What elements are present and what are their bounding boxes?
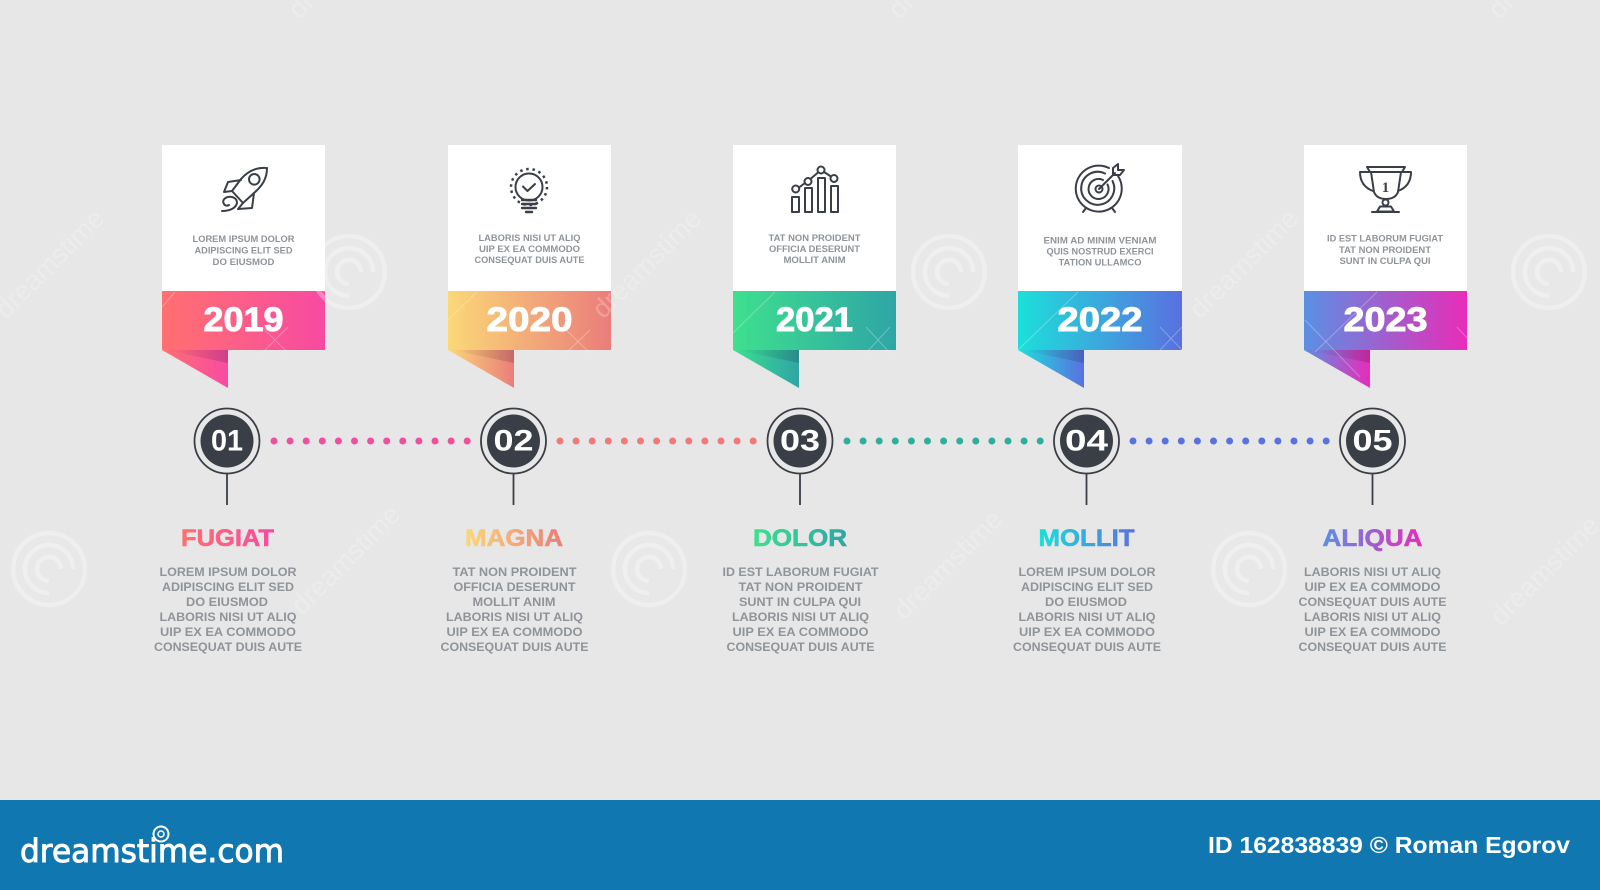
column text: Mollit: CONSEQUAT DUIS AUTE	[1013, 640, 1161, 654]
panel: 2021 card	[733, 145, 896, 388]
year band: 2021	[776, 301, 853, 339]
column text: Dolor: TAT NON PROIDENT	[738, 580, 863, 594]
column text: Magna: MAGNA	[465, 525, 563, 552]
marker 04: 04	[1065, 424, 1108, 458]
column text: Magna: TAT NON PROIDENT	[452, 565, 577, 579]
icon: trophy: 1	[1382, 180, 1389, 196]
column text: Mollit: MOLLIT	[1038, 525, 1135, 552]
year band: 2019	[204, 301, 284, 339]
dotted connector 04-05	[1130, 438, 1330, 444]
marker 01: 01	[211, 424, 243, 458]
column text: Aliqua: LABORIS NISI UT ALIQ	[1304, 610, 1441, 624]
card text: OFFICIA DESERUNT	[769, 244, 861, 254]
marker 03	[768, 408, 832, 505]
column text: Aliqua: UIP EX EA COMMODO	[1304, 625, 1440, 639]
column text: Magna: UIP EX EA COMMODO	[446, 625, 582, 639]
card text: TATION ULLAMCO	[1058, 258, 1142, 268]
icon: target with arrow	[1076, 164, 1124, 212]
column text: Fugiat: LABORIS NISI UT ALIQ	[160, 610, 296, 624]
watermark: faint lattice lines	[162, 292, 1467, 377]
column text: Aliqua: UIP EX EA COMMODO	[1304, 580, 1440, 594]
card text: DO EIUSMOD	[212, 257, 275, 267]
dotted connector 01-02	[270, 438, 471, 444]
column text: Aliqua: LABORIS NISI UT ALIQ	[1304, 565, 1441, 579]
column text: Mollit: ADIPISCING ELIT SED	[1021, 580, 1153, 594]
card text: CONSEQUAT DUIS AUTE	[474, 255, 584, 265]
year band	[448, 291, 611, 350]
panel: 2020 card	[448, 145, 611, 388]
marker 04	[1054, 408, 1119, 505]
column text: Aliqua: CONSEQUAT DUIS AUTE	[1298, 640, 1446, 654]
column text: Fugiat: UIP EX EA COMMODO	[160, 625, 296, 639]
column text: Dolor: CONSEQUAT DUIS AUTE	[726, 640, 874, 654]
column text: Dolor: UIP EX EA COMMODO	[732, 625, 868, 639]
column text: Dolor: DOLOR	[753, 525, 847, 552]
marker 02: 02	[494, 424, 534, 458]
year band	[1304, 291, 1467, 350]
year band	[733, 291, 896, 350]
footer logo: dreamstime.com	[20, 832, 284, 870]
icon: bar chart with trend line	[792, 166, 838, 212]
column text: Magna: LABORIS NISI UT ALIQ	[446, 610, 583, 624]
year band	[1018, 291, 1182, 350]
ribbon tail	[1018, 350, 1084, 388]
column text: Magna	[440, 525, 588, 654]
column text: Dolor: LABORIS NISI UT ALIQ	[732, 610, 869, 624]
card text: QUIS NOSTRUD EXERCI	[1046, 247, 1154, 257]
watermark: dreamstime text: dreamstime	[887, 504, 1008, 625]
column text: Fugiat	[154, 525, 302, 654]
column text: Aliqua: ALIQUA	[1322, 525, 1422, 552]
icon: trophy	[1360, 167, 1411, 212]
card text: ENIM AD MINIM VENIAM	[1044, 236, 1156, 246]
card text: UIP EX EA COMMODO	[479, 244, 580, 254]
column text: Fugiat: CONSEQUAT DUIS AUTE	[154, 640, 302, 654]
year band: 2022	[1058, 301, 1142, 339]
card text	[1327, 234, 1444, 266]
column text: Mollit: UIP EX EA COMMODO	[1019, 625, 1155, 639]
dotted connector 02-03	[556, 438, 757, 444]
footer credit: ID 162838839 © Roman Egorov	[1208, 832, 1570, 858]
year band: 2023	[1344, 301, 1428, 339]
card text: ID EST LABORUM FUGIAT	[1327, 234, 1444, 244]
card text: ADIPISCING ELIT SED	[194, 246, 293, 256]
watermark: dreamstime text	[0, 0, 1600, 631]
card text: SUNT IN CULPA QUI	[1340, 256, 1430, 266]
marker 03: 03	[780, 424, 820, 458]
column text: Dolor: SUNT IN CULPA QUI	[739, 595, 861, 609]
card text	[1044, 236, 1156, 268]
year band	[162, 291, 325, 350]
icon: rocket	[222, 168, 267, 211]
column text: Magna: OFFICIA DESERUNT	[454, 580, 576, 594]
card text	[768, 233, 861, 265]
ribbon tail	[733, 350, 799, 388]
column text: Mollit: LABORIS NISI UT ALIQ	[1018, 610, 1156, 624]
column text: Mollit: DO EIUSMOD	[1045, 595, 1127, 609]
column text: Aliqua: CONSEQUAT DUIS AUTE	[1298, 595, 1446, 609]
footer bar	[0, 800, 1600, 890]
year band: 2020	[486, 301, 572, 339]
ribbon tail	[162, 350, 228, 388]
panel: 2019 card	[162, 145, 325, 388]
panel: 2022 card	[1018, 145, 1182, 388]
marker 05: 05	[1352, 424, 1392, 458]
card text	[192, 234, 295, 267]
card text: LOREM IPSUM DOLOR	[192, 234, 295, 244]
column text: Mollit: LOREM IPSUM DOLOR	[1018, 565, 1156, 579]
dotted connector 03-04	[844, 438, 1044, 444]
card text: MOLLIT ANIM	[784, 255, 846, 265]
marker 02	[481, 408, 546, 505]
marker 01	[194, 408, 260, 505]
watermark: dreamstime text: dreamstime	[586, 203, 707, 324]
card text: LABORIS NISI UT ALIQ	[478, 233, 580, 243]
column text: Mollit	[1013, 525, 1161, 654]
column text: Fugiat: FUGIAT	[181, 525, 274, 552]
icon: light bulb	[511, 169, 547, 212]
ribbon tail	[448, 350, 514, 388]
column text: Magna: MOLLIT ANIM	[472, 595, 556, 609]
watermark: dreamstime text: dreamstime	[1183, 203, 1304, 324]
column text: Magna: CONSEQUAT DUIS AUTE	[440, 640, 588, 654]
ribbon tail	[1304, 350, 1370, 388]
column text: Fugiat: DO EIUSMOD	[186, 595, 268, 609]
watermark: spirals	[13, 236, 1585, 605]
card text: TAT NON PROIDENT	[1339, 245, 1432, 255]
watermark: dreamstime text: dreamstime	[285, 499, 406, 620]
column text: Aliqua	[1298, 525, 1446, 654]
column text: Dolor: ID EST LABORUM FUGIAT	[722, 565, 879, 579]
column text: Fugiat: ADIPISCING ELIT SED	[162, 580, 294, 594]
column text: Dolor	[722, 525, 879, 654]
card text	[474, 233, 584, 265]
column text: Fugiat: LOREM IPSUM DOLOR	[160, 565, 297, 579]
panel: 2023 card	[1304, 145, 1467, 388]
marker 05	[1340, 408, 1405, 505]
card text: TAT NON PROIDENT	[768, 233, 861, 243]
